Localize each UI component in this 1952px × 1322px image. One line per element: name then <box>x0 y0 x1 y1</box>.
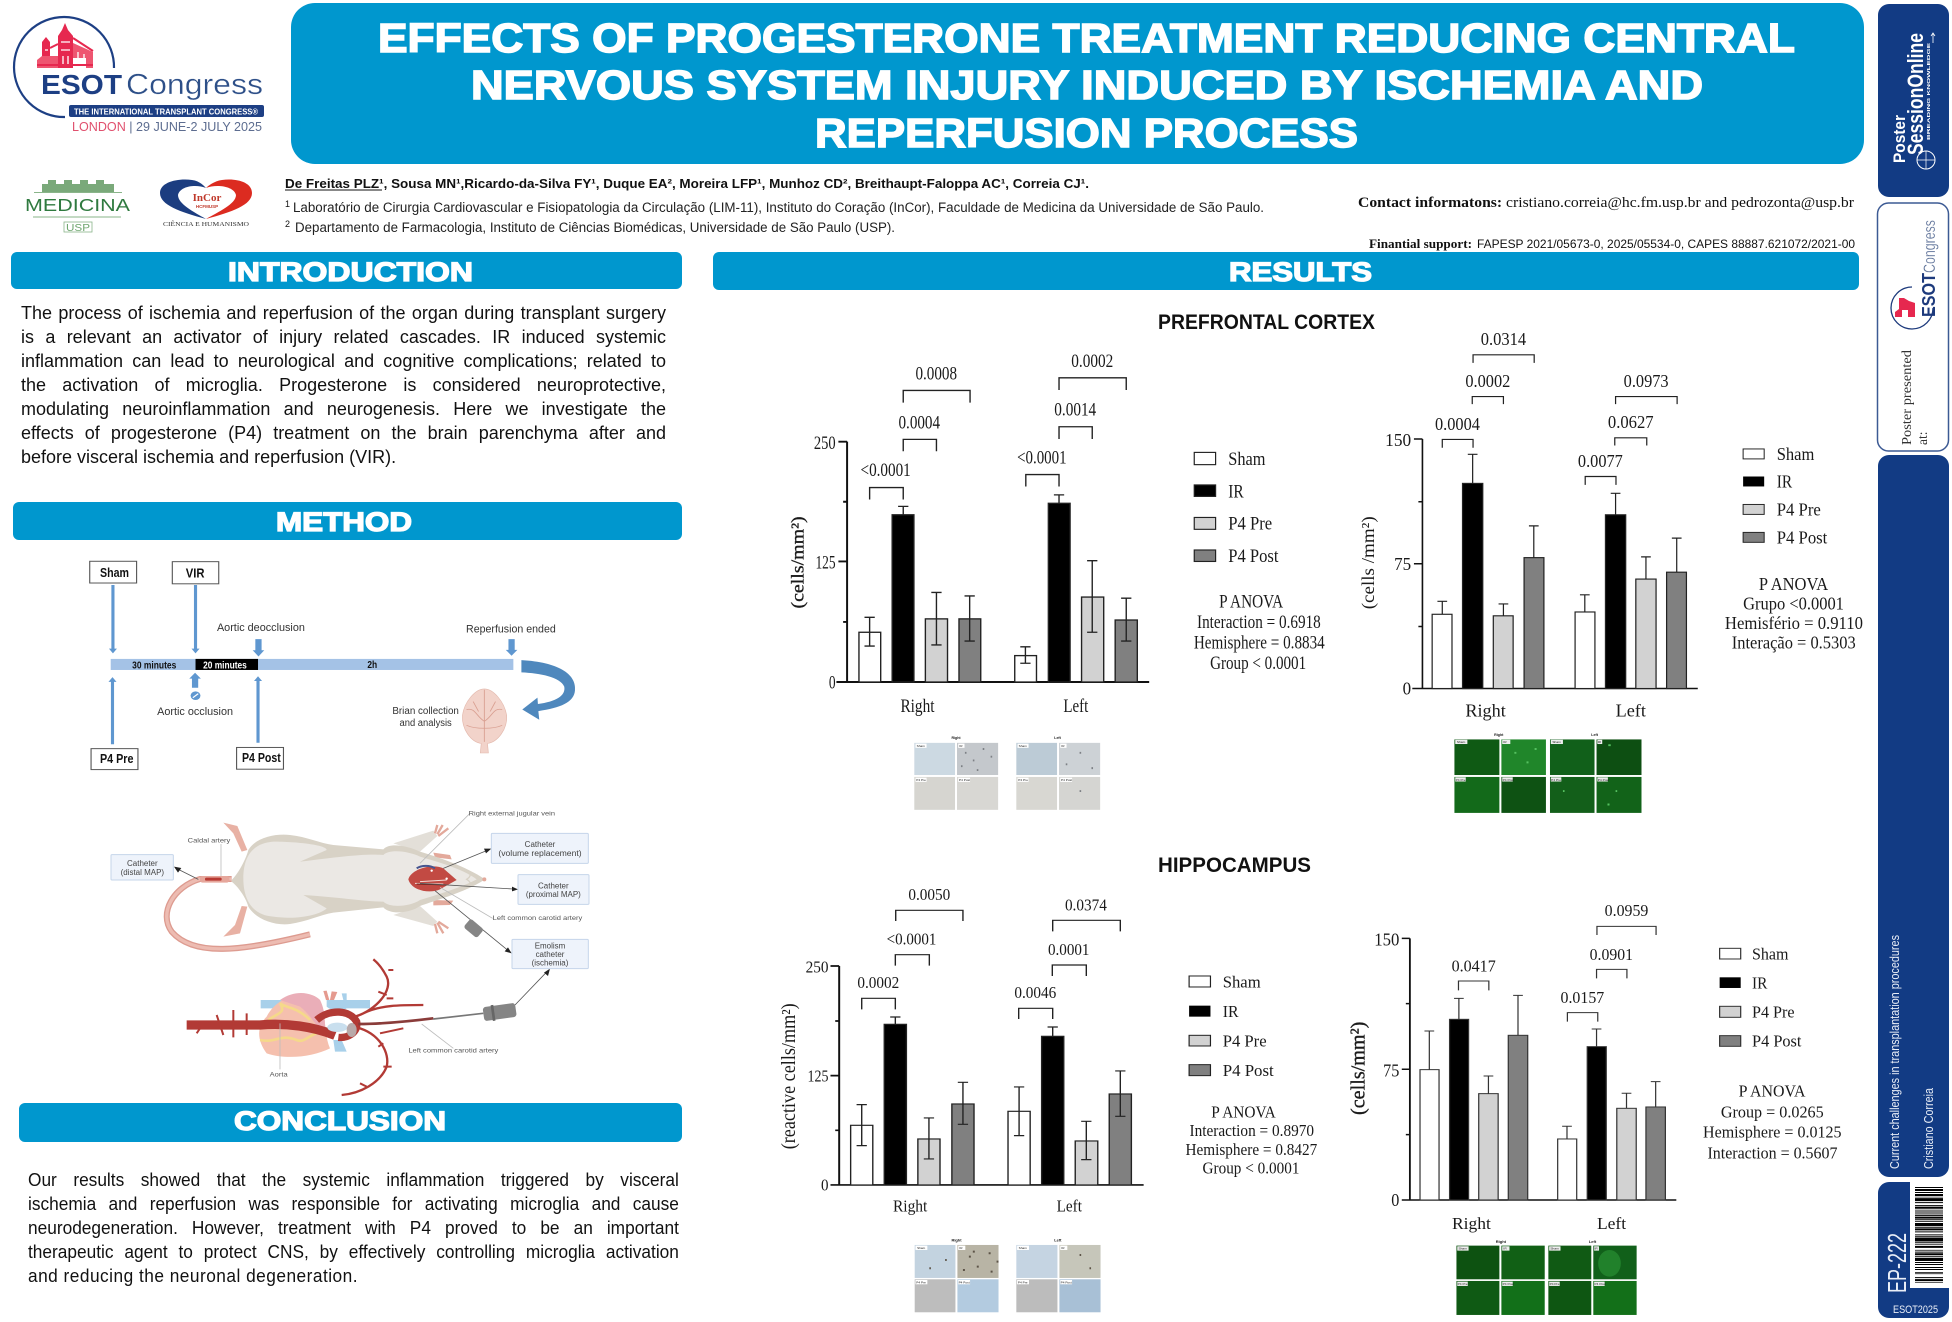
axis labels: Left <box>1057 1197 1082 1215</box>
legend: Sham <box>1223 973 1261 991</box>
p values: 0.0077 <box>1578 451 1623 472</box>
rat surgical schematic <box>111 810 589 1095</box>
legend: P4 Post <box>1228 546 1279 567</box>
catheter labels: Catheter <box>538 881 569 890</box>
sidebar: poster presented at ESOT Congress: Poster presented <box>1899 350 1914 445</box>
bars <box>1432 483 1686 689</box>
catheter labels: (distal MAP) <box>121 868 164 877</box>
micrographs: fluorescence: Sham <box>1552 740 1561 744</box>
axis labels: Right <box>900 696 935 717</box>
significance brackets <box>1458 926 1656 1022</box>
p values: 0.0374 <box>1065 896 1107 914</box>
micrographs: fluorescence: P4 Pre <box>1550 1282 1560 1286</box>
legend: P4 Pre <box>1752 1003 1795 1022</box>
text block: introduction <box>21 303 666 467</box>
legend <box>1194 449 1279 567</box>
catheter labels: Left common carotid artery <box>408 1047 499 1054</box>
sidebar: Poster Session Online: BREADING KNOWLEDGE <box>1926 43 1931 140</box>
bar chart: prefrontal cortex microglia <box>787 351 1325 810</box>
micrographs: bright-field: Sham <box>1019 1246 1028 1250</box>
ANOVA statistics: Hemisfério = 0.9110 <box>1725 613 1863 634</box>
p values <box>1435 330 1669 472</box>
axis labels: 250 <box>806 958 829 976</box>
micrographs: bright-field: P4 Post <box>1061 778 1072 782</box>
logo: InCor: CIÊNCIA E HUMANISMO <box>163 220 250 228</box>
catheter labels: Catheter <box>127 859 158 868</box>
contact information: Contact informatons: cristiano.correia@hc.fm.usp.br and pedrozonta@usp.br <box>1358 195 1854 211</box>
catheter labels: Catheter <box>525 840 556 849</box>
axis labels: 250 <box>814 433 836 454</box>
micrographs: fluorescence: P4 Post <box>1503 1282 1514 1286</box>
text block: conclusion: neurodegeneration. However, treatment with P4 proved to be an important <box>28 1218 679 1238</box>
catheter labels: (volume replacement) <box>498 849 582 858</box>
heading: method: METHOD <box>276 507 412 537</box>
legend <box>1189 973 1274 1080</box>
title banner: NERVOUS SYSTEM INJURY INDUCED BY ISCHEMIA AND <box>471 62 1703 108</box>
p values: 0.0314 <box>1481 330 1527 350</box>
p values: 0.0002 <box>857 973 899 992</box>
axis labels: Left <box>1597 1215 1627 1233</box>
sidebar: poster code and barcode: EP-222 <box>1882 1233 1912 1293</box>
logo: ESOT Congress <box>14 17 264 134</box>
legend: P4 Post <box>1752 1032 1802 1051</box>
logo: ESOT Congress: THE INTERNATIONAL TRANSPLANT CONGRESS® <box>74 106 259 116</box>
micrographs: fluorescence <box>1454 733 1641 813</box>
axes <box>836 442 1149 683</box>
sidebar: poster presented at ESOT Congress: at: <box>1915 432 1930 445</box>
p values: 0.0050 <box>908 885 950 904</box>
micrographs: bright-field: P4 Post <box>959 778 970 782</box>
micrographs: bright-field <box>914 736 1100 810</box>
legend <box>1743 445 1828 548</box>
axis labels <box>778 958 1082 1215</box>
experimental timeline: and analysis <box>400 718 452 729</box>
logo: Medicina USP <box>25 180 130 234</box>
axis labels: Left <box>1616 701 1647 721</box>
micrographs: bright-field: Right <box>951 736 961 740</box>
text block: conclusion: ischemia and reperfusion was responsible for activating microglia and cause <box>28 1194 679 1214</box>
micrographs: fluorescence: IR <box>1595 1247 1598 1251</box>
micrographs: bright-field: P4 Pre <box>1018 1281 1028 1284</box>
text block: conclusion: therapeutic agent to protect CNS, by effectively controlling microglia activation <box>28 1242 679 1262</box>
sidebar: Poster Session Online <box>1878 4 1949 197</box>
heading: results: RESULTS <box>1229 257 1372 287</box>
ANOVA statistics: Interaction = 0.5607 <box>1707 1144 1837 1163</box>
catheter labels: Left common carotid artery <box>493 915 583 922</box>
text block: introduction: inflammation can lead to neurological and cognitive complications; related to <box>21 351 666 371</box>
sidebar: session and presenter: Cristiano Correia <box>1922 1088 1936 1169</box>
text block: introduction: The process of ischemia and reperfusion of the organ during transplant surgery <box>21 303 666 323</box>
ANOVA statistics: Interaction = 0.8970 <box>1190 1121 1314 1140</box>
p values: 0.0014 <box>1054 400 1096 421</box>
micrographs: bright-field: Left <box>1054 736 1062 740</box>
sidebar: session and presenter: Current challenges in transplantation procedures <box>1888 935 1902 1169</box>
text block: conclusion: Our results showed that the systemic inflammation triggered by visceral <box>28 1170 679 1190</box>
curved arrow to brain <box>521 660 575 720</box>
ANOVA statistics <box>1194 592 1325 674</box>
axis labels: 150 <box>1374 930 1400 950</box>
sidebar: poster presented at ESOT Congress <box>1878 203 1948 451</box>
legend <box>1720 945 1802 1051</box>
logo: ESOT Congress: ESOT <box>41 69 122 100</box>
significance brackets <box>1442 355 1677 485</box>
ANOVA statistics: Hemisphere = 0.8427 <box>1186 1140 1317 1159</box>
micrographs: bright-field: IR <box>959 1246 963 1250</box>
micrographs: bright-field: Sham <box>917 744 925 748</box>
heading: prefrontal cortex: PREFRONTAL CORTEX <box>1158 311 1375 334</box>
text block: introduction: effects of progesterone (P4) treatment on the brain parenchyma after and <box>21 423 666 443</box>
p values: 0.0901 <box>1590 946 1633 964</box>
micrographs: bright-field: Left <box>1054 1239 1062 1242</box>
p values: <0.0001 <box>887 930 936 948</box>
micrographs: fluorescence: P4 Pre <box>1458 1282 1468 1286</box>
micrographs: bright-field: Right <box>951 1239 962 1242</box>
sidebar: Poster Session Online: Poster <box>1890 115 1909 163</box>
legend: IR <box>1223 1002 1239 1021</box>
bars <box>859 503 1137 682</box>
micrographs: fluorescence: Left <box>1591 733 1599 737</box>
sidebar: poster code and barcode <box>1878 1182 1949 1318</box>
axis labels: (reactive cells/mm²) <box>778 1003 800 1149</box>
catheter labels: catheter <box>536 950 565 959</box>
error bars <box>1424 995 1661 1139</box>
error bars <box>1437 454 1682 616</box>
micrographs: fluorescence: Right <box>1494 733 1504 737</box>
p values: <0.0001 <box>1017 448 1067 468</box>
axis labels: Right <box>1465 701 1507 721</box>
sidebar: session and presenter <box>1878 455 1949 1177</box>
icon: Tower Bridge <box>37 23 93 68</box>
sidebar: poster presented at ESOT Congress: ESOT <box>1919 273 1939 317</box>
catheter labels: Aorta <box>270 1071 288 1078</box>
legend: P4 Pre <box>1223 1032 1267 1050</box>
micrographs: bright-field: IR <box>959 744 963 748</box>
catheter labels: Emolism <box>535 941 566 950</box>
axis labels: (cells/mm²) <box>787 516 809 609</box>
catheter labels: Right external jugular vein <box>469 810 556 817</box>
micrographs: fluorescence <box>1456 1240 1637 1315</box>
ANOVA statistics: Hemisphere = 0.0125 <box>1703 1123 1842 1142</box>
method timeline diagram <box>90 561 575 770</box>
axis labels: Right <box>1452 1215 1492 1233</box>
p values: 0.0627 <box>1608 412 1654 433</box>
error bars <box>864 495 1131 663</box>
p values: 0.0157 <box>1561 989 1604 1007</box>
experimental timeline: Aortic occlusion <box>157 705 233 718</box>
micrographs: fluorescence: P4 Post <box>1595 1282 1606 1286</box>
text block: introduction: modulating neuroinflammation and neurogenesis. Here we investigate the <box>21 399 666 419</box>
axis labels <box>1358 430 1647 721</box>
axes <box>830 966 1144 1186</box>
catheter labels <box>111 810 589 1078</box>
micrographs: fluorescence: P4 Pre <box>1551 778 1561 782</box>
title banner <box>291 3 1864 164</box>
micrographs: bright-field: IR <box>1061 1246 1065 1250</box>
micrographs: fluorescence: P4 Post <box>1598 778 1609 782</box>
axes <box>1402 938 1676 1201</box>
text block: introduction: the activation of microglia. Progesterone is considered neuroprotective, <box>21 375 666 395</box>
bar chart: prefrontal cortex neurons <box>1358 330 1863 813</box>
micrographs: fluorescence: IR <box>1503 1247 1507 1251</box>
legend: IR <box>1777 472 1792 492</box>
experimental timeline <box>90 561 556 770</box>
micrographs: fluorescence: Sham <box>1458 1247 1467 1251</box>
heading: results <box>713 252 1859 290</box>
catheter labels: (ischemia) <box>532 959 569 968</box>
bar chart: hippocampus microglia <box>778 885 1317 1312</box>
p values: 0.0959 <box>1605 902 1648 920</box>
authors and affiliations: Departamento de Farmacologia, Instituto de Ciências Biomédicas, Universidade de São Paulo (USP). <box>295 220 895 235</box>
p values: 0.0004 <box>1435 414 1480 435</box>
p values <box>1452 902 1648 1007</box>
micrographs: bright-field: IR <box>1061 744 1065 748</box>
axis labels: 0 <box>829 673 836 693</box>
title banner: REPERFUSION PROCESS <box>815 110 1358 156</box>
axis labels: 0 <box>1391 1191 1400 1210</box>
p values: 0.0973 <box>1624 371 1669 392</box>
rat <box>167 823 486 949</box>
ANOVA statistics <box>1186 1103 1317 1177</box>
heading: conclusion <box>19 1103 682 1142</box>
experimental timeline: Sham <box>100 566 129 580</box>
significance brackets <box>870 378 1126 499</box>
catheter lines and arrows <box>174 813 550 1069</box>
axis labels: 150 <box>1385 430 1411 451</box>
p values: 0.0046 <box>1014 983 1056 1002</box>
micrographs: fluorescence: Right <box>1496 1240 1507 1244</box>
experimental timeline: VIR <box>186 566 205 580</box>
legend: P4 Pre <box>1777 500 1821 520</box>
logo: InCor: HCFMUSP <box>196 204 218 209</box>
micrographs: bright-field: P4 Pre <box>916 778 926 782</box>
axis labels: 125 <box>808 1067 829 1085</box>
micrographs: bright-field: Sham <box>1019 744 1027 748</box>
p values: 0.0001 <box>1048 940 1089 959</box>
heading: method <box>13 502 682 540</box>
icon: brain <box>462 689 507 753</box>
p values: <0.0001 <box>861 460 911 481</box>
financial support: Finantial support: <box>1369 236 1472 251</box>
axis labels: Left <box>1063 696 1089 717</box>
p values <box>857 885 1107 1002</box>
experimental timeline: 20 minutes <box>203 660 247 671</box>
micrographs: bright-field <box>915 1239 1101 1312</box>
micrographs: fluorescence: Sham <box>1457 740 1466 744</box>
significance brackets <box>862 910 1120 1019</box>
authors and affiliations: 2 <box>285 219 290 229</box>
axis labels: Right <box>893 1197 927 1215</box>
p values: 0.0008 <box>915 364 957 385</box>
ANOVA statistics <box>1703 1082 1842 1163</box>
ANOVA statistics: Group < 0.0001 <box>1203 1159 1299 1177</box>
logo: InCor: InCor <box>193 192 221 204</box>
heading: introduction: INTRODUCTION <box>228 257 473 287</box>
p values: 0.0417 <box>1452 957 1496 976</box>
logo: Medicina USP: USP <box>66 223 90 234</box>
logo: Medicina USP: MEDICINA <box>25 195 130 215</box>
experimental timeline: 2h <box>367 660 377 671</box>
axis labels: 125 <box>815 553 836 573</box>
ANOVA statistics: P ANOVA <box>1739 1082 1806 1101</box>
barcode <box>1915 1187 1943 1283</box>
micrographs: bright-field: P4 Post <box>1061 1281 1072 1284</box>
axis labels: (cells /mm²) <box>1358 516 1378 609</box>
logo: InCor <box>160 180 252 228</box>
experimental timeline: P4 Post <box>242 751 281 765</box>
experimental timeline: 30 minutes <box>132 660 176 671</box>
sidebar: poster presented at ESOT Congress: Congress <box>1920 220 1939 273</box>
error bars <box>857 1017 1125 1160</box>
ANOVA statistics: Hemisphere = 0.8834 <box>1194 633 1325 653</box>
authors and affiliations <box>285 176 1264 235</box>
ANOVA statistics: Interação = 0.5303 <box>1732 633 1856 654</box>
legend: P4 Post <box>1777 528 1828 548</box>
logo: ESOT Congress: LONDON | 29 JUNE-2 JULY 2025 <box>72 120 262 134</box>
micrographs: fluorescence: P4 Pre <box>1456 778 1466 782</box>
p values: 0.0002 <box>1465 371 1510 392</box>
authors and affiliations: Laboratório de Cirurgia Cardiovascular e Fisiopatologia da Circulação (LIM-11), Instituto do Coração (InCor), Faculdade de Medicina da Universidade de São Paulo. <box>293 200 1264 215</box>
axis labels: (cells/mm²) <box>1347 1022 1370 1115</box>
text block: introduction: is a relevant an activator of injury related cascades. IR induced systemic <box>21 327 666 347</box>
heading: introduction <box>11 252 682 289</box>
experimental timeline: Brian collection <box>392 705 459 717</box>
experimental timeline: P4 Pre <box>100 752 134 766</box>
authors and affiliations: De Freitas PLZ¹, Sousa MN¹,Ricardo-da-Silva FY¹, Duque EA², Moreira LFP¹, Munhoz CD², Breithaupt-Faloppa AC¹, Correia CJ¹. <box>285 176 1089 191</box>
micrographs: fluorescence: IR <box>1598 740 1602 744</box>
axis labels <box>1347 930 1627 1233</box>
ANOVA statistics: Grupo <0.0001 <box>1743 594 1844 614</box>
catheter labels: Caldal artery <box>188 837 231 844</box>
authors and affiliations: 1 <box>285 199 290 209</box>
micrographs: bright-field: P4 Post <box>959 1281 970 1284</box>
legend: P4 Pre <box>1228 514 1272 535</box>
bars <box>851 1024 1131 1185</box>
axis labels: 75 <box>1394 554 1411 575</box>
experimental timeline: Aortic deocclusion <box>217 621 305 634</box>
title banner: EFFECTS OF PROGESTERONE TREATMENT REDUCING CENTRAL <box>378 15 1795 61</box>
ANOVA statistics: P ANOVA <box>1211 1103 1276 1121</box>
micrographs: bright-field: P4 Pre <box>916 1281 926 1284</box>
axis labels: 0 <box>1403 679 1411 700</box>
bar chart: hippocampus neurons <box>1347 902 1842 1315</box>
micrographs: bright-field: P4 Pre <box>1018 778 1028 782</box>
catheter labels: (proximal MAP) <box>526 890 581 899</box>
micrographs: bright-field: Sham <box>917 1246 926 1250</box>
logo: ESOT Congress: Congress <box>126 69 263 101</box>
ANOVA statistics: P ANOVA <box>1759 575 1828 595</box>
experimental timeline: Reperfusion ended <box>466 622 556 635</box>
bars <box>1420 1019 1665 1200</box>
axes <box>1412 439 1698 689</box>
heart and aorta <box>187 959 517 1095</box>
ANOVA statistics: P ANOVA <box>1219 592 1283 612</box>
ANOVA statistics: Group = 0.0265 <box>1721 1103 1824 1122</box>
sidebar: poster code and barcode: ESOT2025 <box>1893 1304 1938 1316</box>
legend: Sham <box>1777 445 1815 465</box>
legend: Sham <box>1228 449 1265 470</box>
text block: conclusion: and reducing the neuronal degeneration. <box>28 1266 358 1286</box>
p values: 0.0004 <box>898 413 940 434</box>
p values: 0.0002 <box>1071 351 1113 372</box>
legend: IR <box>1228 482 1244 502</box>
axis labels: 0 <box>821 1176 829 1194</box>
text block: introduction: before visceral ischemia and reperfusion (VIR). <box>21 447 396 467</box>
heading: hippocampus: HIPPOCAMPUS <box>1158 854 1311 877</box>
micrographs: fluorescence: IR <box>1503 740 1507 744</box>
sidebar: Poster Session Online: SessionOnline <box>1903 33 1928 155</box>
heading: conclusion: CONCLUSION <box>234 1106 446 1136</box>
financial support: FAPESP 2021/05673-0, 2025/05534-0, CAPES 88887.621072/2021-00 <box>1477 237 1855 251</box>
micrographs: fluorescence: Left <box>1589 1240 1597 1244</box>
ANOVA statistics: Interaction = 0.6918 <box>1197 612 1321 633</box>
micrographs: fluorescence: P4 Post <box>1503 778 1514 782</box>
axis labels: 75 <box>1383 1061 1400 1081</box>
micrographs: fluorescence: Sham <box>1550 1247 1559 1251</box>
legend: IR <box>1752 974 1768 993</box>
text block: conclusion <box>28 1170 679 1286</box>
axis labels <box>787 433 1089 717</box>
legend: Sham <box>1752 945 1789 964</box>
ANOVA statistics: Group < 0.0001 <box>1210 653 1306 674</box>
p values <box>861 351 1113 481</box>
legend: P4 Post <box>1223 1061 1274 1080</box>
ANOVA statistics <box>1725 575 1863 654</box>
